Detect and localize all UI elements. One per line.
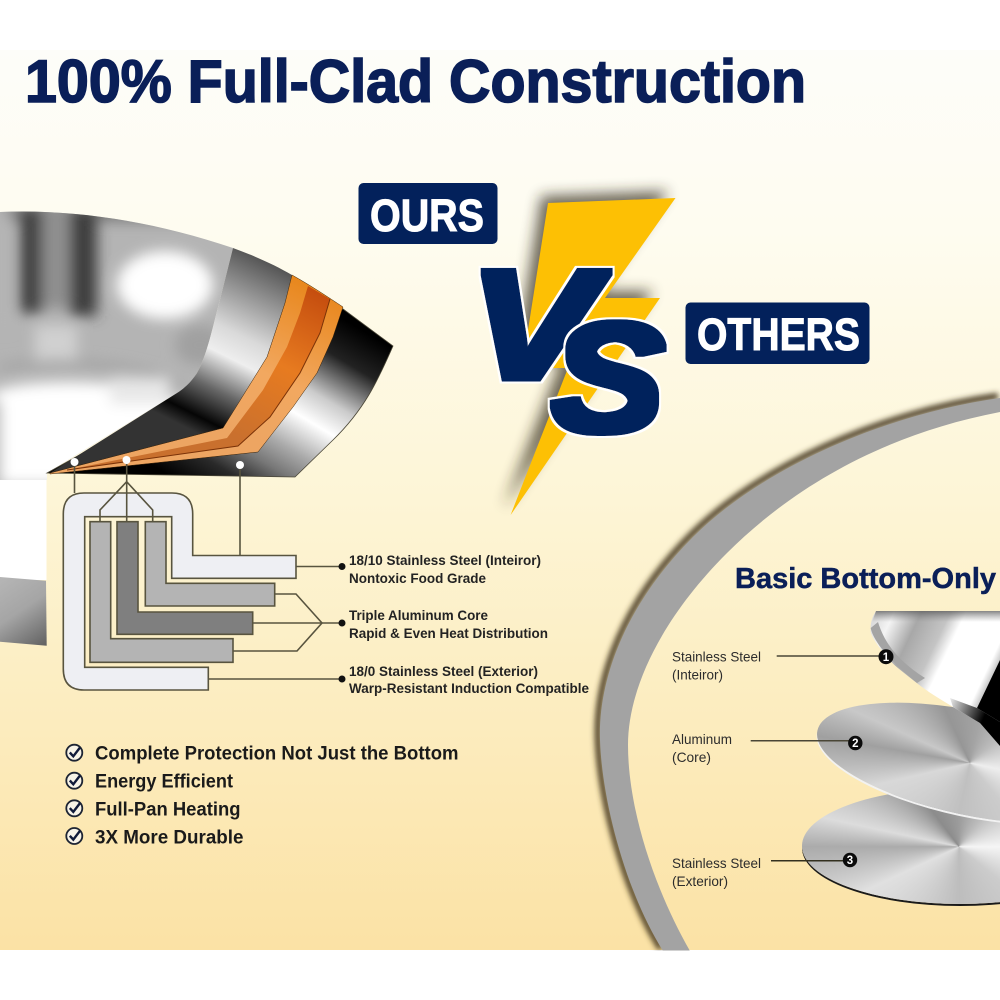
inner steel layer (50, 248, 292, 473)
VS letters: S (551, 291, 665, 464)
disc: exterior steel (802, 788, 1000, 904)
bottom white band (0, 950, 1000, 1000)
outer steel layer (47, 309, 393, 477)
label: aluminum core (672, 731, 732, 765)
aluminum layer middle (117, 522, 253, 634)
label: aluminum core: Aluminum (672, 731, 732, 747)
layer labels: Nontoxic Food Grade (349, 571, 486, 586)
heading: basic bottom-only: Basic Bottom-Only (735, 563, 996, 595)
badge: others: OTHERS (697, 309, 860, 360)
callout 3 (771, 853, 857, 867)
label: aluminum core: (Core) (672, 749, 711, 765)
check item 4: 3X More Durable (95, 826, 244, 848)
check item 2: Energy Efficient (95, 771, 233, 793)
copper layers (50, 275, 343, 474)
pan cross-section illustration (0, 205, 393, 485)
label: stainless exterior: Stainless Steel (672, 855, 761, 871)
callout 2 (751, 736, 862, 750)
callout 3: 3 (847, 855, 853, 867)
disc: aluminum core (807, 680, 1000, 846)
VS letters: V (468, 238, 610, 411)
check item 3: Full-Pan Heating (95, 799, 240, 821)
aluminum layer inner (145, 522, 275, 606)
layer labels (349, 553, 589, 696)
layer labels: 18/0 Stainless Steel (Exterior) (349, 664, 538, 679)
label: stainless exterior: (Exterior) (672, 873, 728, 889)
layer labels: Triple Aluminum Core (349, 608, 488, 623)
pot bottom illustration (871, 611, 1000, 746)
pot dark base (950, 698, 1000, 746)
pot rim (871, 622, 925, 683)
icon: lightning bolt (504, 191, 676, 515)
layer labels: Warp-Resistant Induction Compatible (349, 681, 589, 696)
layer diagram (63, 464, 346, 690)
pot dark panel (977, 660, 1000, 722)
callout dots (70, 458, 78, 466)
label: stainless interior: Stainless Steel (672, 648, 761, 664)
aluminum layer outer (90, 522, 233, 662)
layer labels: Rapid & Even Heat Distribution (349, 626, 548, 641)
callout 1 (777, 649, 894, 664)
exterior and interior steel band (63, 493, 296, 690)
label dots (338, 563, 346, 682)
panel: others ring (598, 396, 1000, 951)
callout 2: 2 (852, 738, 859, 750)
label: stainless interior (672, 648, 761, 682)
white block behind pan (0, 470, 46, 580)
bowl interior (0, 205, 240, 485)
layer labels: 18/10 Stainless Steel (Inteiror) (349, 553, 541, 568)
benefits checklist (66, 742, 459, 848)
label: stainless exterior (672, 855, 761, 889)
label: stainless interior: (Inteiror) (672, 666, 723, 682)
VS letters (468, 238, 665, 464)
badge: ours: OURS (370, 190, 484, 241)
callout 1: 1 (883, 652, 890, 664)
pan wall stub (0, 577, 47, 646)
title: 100% Full-Clad Construction (25, 48, 806, 115)
connector lines (74, 464, 342, 679)
check item 1: Complete Protection Not Just the Bottom (95, 742, 458, 764)
